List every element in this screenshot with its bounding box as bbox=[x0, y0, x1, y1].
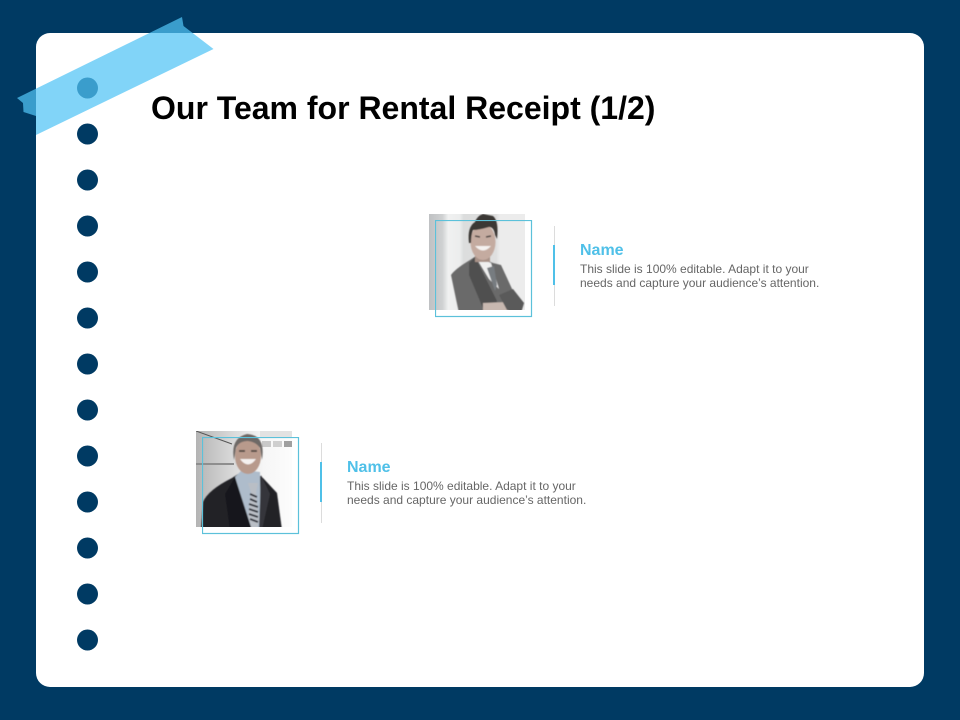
jacket bbox=[451, 256, 524, 313]
panel: team member 2 bbox=[196, 431, 586, 534]
divider with accent bbox=[553, 226, 555, 306]
grey hair bbox=[233, 434, 263, 460]
member description: This slide is 100% editable. Adapt it to your bbox=[347, 479, 576, 493]
panel: team member 1 bbox=[429, 214, 819, 318]
lapel bbox=[226, 478, 250, 527]
member name: Name bbox=[347, 459, 391, 476]
member description bbox=[347, 479, 586, 507]
portrait photo: smiling man in dark suit bbox=[196, 431, 292, 527]
portrait photo: man with crossed arms bbox=[429, 214, 525, 310]
face bbox=[235, 438, 261, 474]
face bbox=[470, 224, 496, 260]
dark suit bbox=[201, 474, 282, 530]
column of binder holes bbox=[77, 78, 98, 650]
member description: needs and capture your audience’s attention. bbox=[347, 493, 586, 507]
divider with accent bbox=[320, 443, 322, 523]
shirt and tie bbox=[478, 261, 500, 290]
photo frame outline bbox=[202, 437, 300, 534]
hair bbox=[469, 214, 498, 243]
striped tie bbox=[248, 484, 258, 527]
member name: Name bbox=[580, 242, 624, 259]
photo frame outline bbox=[435, 220, 532, 318]
neck bbox=[474, 256, 490, 263]
member description: needs and capture your audience’s attention. bbox=[580, 276, 819, 290]
crossed arms bbox=[482, 302, 509, 310]
shirt bbox=[235, 470, 261, 530]
member description bbox=[580, 262, 819, 290]
title: Our Team for Rental Receipt (1/2) bbox=[151, 90, 655, 126]
decorative blue tape bbox=[17, 17, 214, 135]
member description: This slide is 100% editable. Adapt it to your bbox=[580, 262, 809, 276]
